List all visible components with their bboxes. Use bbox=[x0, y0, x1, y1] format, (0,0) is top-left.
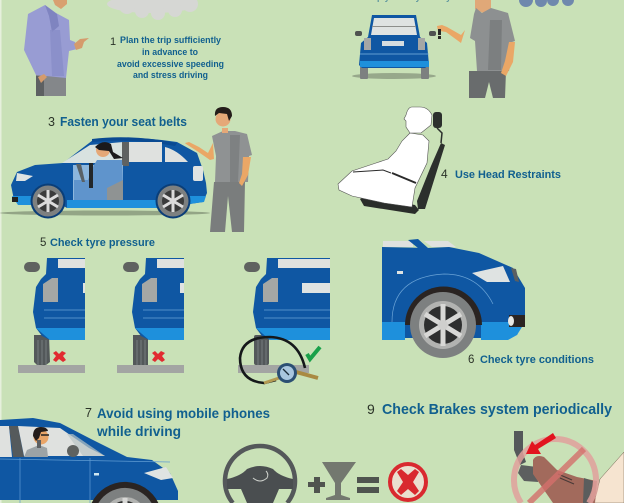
heading: tip 9 check brakes system periodically: 9 bbox=[367, 401, 375, 417]
illustration: foot on brake pedal with prohibition sign bbox=[514, 431, 624, 503]
icon: equals sign bbox=[357, 477, 379, 493]
heading: tip 5 check tyre pressure: 5 bbox=[40, 237, 46, 249]
illustration: rear view of blue car bbox=[352, 15, 436, 79]
text: tip 1 plan the trip: avoid excessive speeding bbox=[117, 59, 224, 70]
illustration: over-inflated tyre bbox=[117, 258, 184, 373]
illustration: man in purple shirt pointing bbox=[24, 0, 89, 96]
illustration: blue-grey cloud bbox=[519, 0, 574, 7]
text: tip 1 plan the trip: Plan the trip sufficiently bbox=[120, 35, 222, 46]
heading: tip 5 check tyre pressure: Check tyre pressure bbox=[50, 237, 155, 249]
icon: red cross in circle bbox=[390, 464, 426, 500]
text: tip 1 plan the trip: 1 bbox=[110, 36, 116, 48]
icon: plus sign bbox=[308, 477, 325, 493]
heading: tip 4 use head restraints: 4 bbox=[441, 167, 448, 181]
illustration: driver on mobile phone in blue car bbox=[0, 418, 178, 503]
heading: tip 7 avoid using mobile phones: 7 bbox=[85, 406, 92, 420]
illustration: blue car with woman fastening belt bbox=[0, 137, 210, 218]
heading: tip 3 fasten your seat belts: 3 bbox=[48, 115, 55, 129]
illustration: man in grey shirt beside car bbox=[185, 107, 252, 232]
heading: tip 7 avoid using mobile phones bbox=[85, 405, 270, 439]
text: tip 1 plan the trip: and stress driving bbox=[133, 70, 208, 81]
heading: tip 7 avoid using mobile phones: Avoid using mobile phones bbox=[97, 405, 270, 421]
illustration: under-inflated tyre bbox=[18, 258, 85, 373]
illustration: correct tyre with pressure gauge bbox=[238, 258, 330, 383]
illustration: front wheel of blue car bbox=[382, 239, 525, 358]
icon: cocktail glass bbox=[322, 462, 356, 500]
illustration: grey thought cloud bbox=[107, 0, 198, 20]
illustration: man seated showing head restraint bbox=[338, 107, 445, 214]
heading: tip 9 check brakes system periodically: Check Brakes system periodically bbox=[382, 401, 613, 418]
illustration: man in grey shirt holding car keys bbox=[437, 0, 515, 98]
heading: tip 6 check tyre conditions: Check tyre conditions bbox=[480, 354, 594, 366]
text: tip 1 plan the trip: in advance to bbox=[142, 47, 198, 58]
heading: tip 7 avoid using mobile phones: while driving bbox=[96, 423, 181, 439]
heading: tip 3 fasten your seat belts: Fasten your seat belts bbox=[60, 114, 187, 129]
heading: tip 4 use head restraints: Use Head Restraints bbox=[455, 169, 561, 181]
text: tip 1 plan the trip bbox=[110, 35, 224, 81]
icon: steering wheel bbox=[225, 446, 295, 503]
heading: tip 6 check tyre conditions: 6 bbox=[468, 354, 474, 366]
